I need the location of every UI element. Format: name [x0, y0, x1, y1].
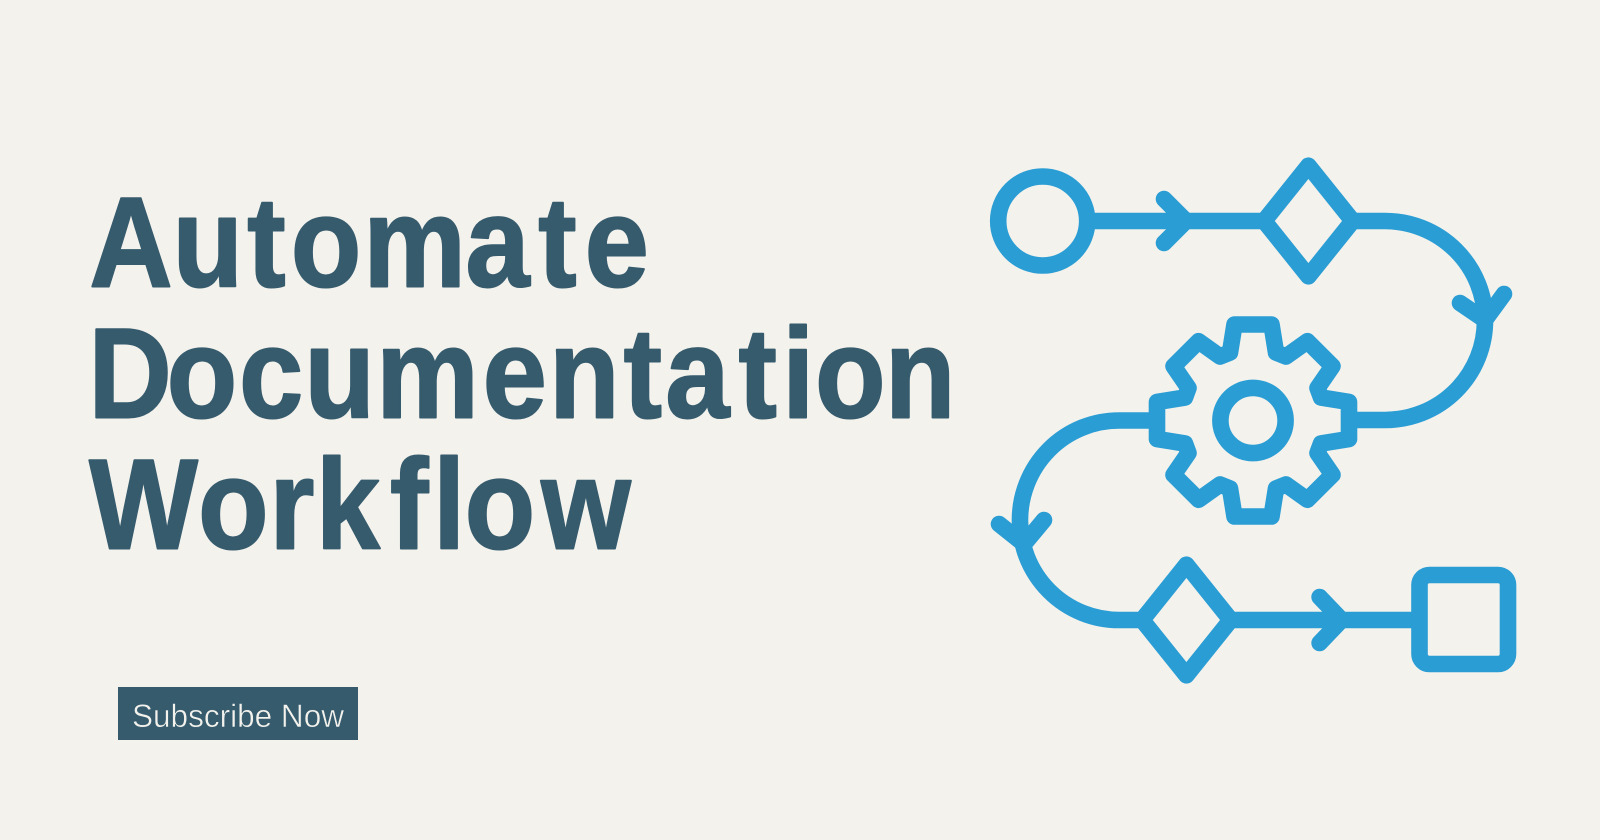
icon: end square	[1420, 575, 1508, 664]
arrow: last connector chevron	[1320, 597, 1342, 643]
title line 3: Workflow	[89, 433, 631, 576]
icon: first decision diamond	[1264, 166, 1353, 276]
arrow: right curve chevron	[1460, 294, 1504, 320]
button: Subscribe Now: Subscribe Now	[132, 698, 345, 734]
title	[89, 171, 955, 576]
workflow diagram	[998, 166, 1508, 675]
title line 2: Documentation	[89, 302, 955, 445]
connector: second decision to end square	[1228, 612, 1420, 628]
icon: second decision diamond	[1142, 565, 1231, 675]
arrow: first connector chevron	[1164, 199, 1186, 243]
arrow: left curve chevron	[999, 520, 1044, 544]
icon: process gear	[1157, 324, 1349, 516]
connector: curve from gear to second decision	[1020, 420, 1155, 620]
connector: circle to first decision	[1085, 213, 1266, 229]
button: Subscribe Now	[118, 687, 358, 740]
title line 1: Automate	[89, 171, 649, 314]
connector: curve from first decision to gear	[1350, 221, 1485, 420]
icon: start circle	[998, 176, 1087, 266]
